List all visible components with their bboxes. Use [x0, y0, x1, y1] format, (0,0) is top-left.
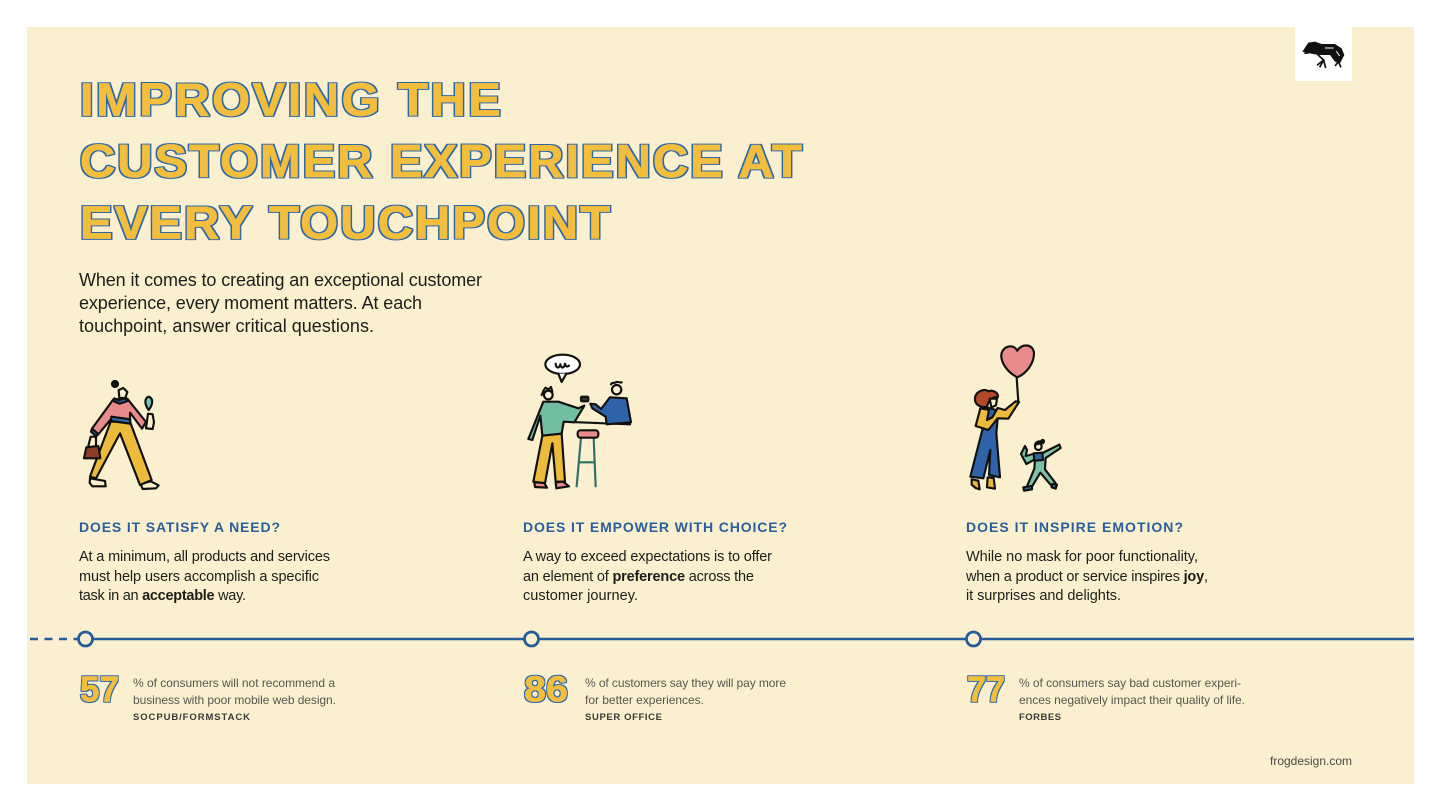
- intro text: When it comes to creating an exceptional customer: [79, 270, 482, 290]
- stat 2: SUPER OFFICE: [585, 712, 662, 723]
- column 3 body: it surprises and delights.: [966, 588, 1121, 604]
- column 2 body: an element of preference across the: [523, 569, 754, 585]
- column 2 heading: DOES IT EMPOWER WITH CHOICE?: [523, 519, 787, 535]
- logo: frog: [1295, 27, 1352, 81]
- column 3 body: While no mask for poor functionality,: [966, 549, 1198, 565]
- column 1 heading: DOES IT SATISFY A NEED?: [79, 519, 280, 535]
- footer url: frogdesign.com: [1270, 754, 1352, 768]
- stat 2: % of customers say they will pay more: [585, 676, 786, 690]
- title: EVERY TOUCHPOINT: [80, 198, 610, 249]
- column 1 body: must help users accomplish a specific: [79, 569, 319, 585]
- stat 3: [967, 668, 1245, 723]
- column 3 heading: DOES IT INSPIRE EMOTION?: [966, 519, 1183, 535]
- stat 1: [80, 668, 336, 723]
- illustration: woman with heart balloon and child: [970, 345, 1061, 491]
- stat 3: ences negatively impact their quality of life.: [1019, 693, 1245, 707]
- column 1 body: At a minimum, all products and services: [79, 549, 330, 565]
- title: [80, 75, 802, 249]
- title: IMPROVING THE: [80, 75, 501, 126]
- intro text: [79, 270, 482, 336]
- column 2 body: customer journey.: [523, 588, 638, 604]
- illustration: customer and bartender: [528, 355, 631, 488]
- title: CUSTOMER EXPERIENCE AT: [80, 136, 802, 188]
- stat 3: FORBES: [1019, 712, 1061, 723]
- stat 2: [524, 668, 786, 723]
- illustration: woman walking with bag and phone: [84, 381, 159, 489]
- stat 2: 86: [524, 668, 568, 710]
- intro text: experience, every moment matters. At each: [79, 293, 422, 313]
- stat 1: business with poor mobile web design.: [133, 693, 336, 707]
- stat 3: % of consumers say bad customer experi-: [1019, 676, 1241, 690]
- column 3 body: [965, 549, 1208, 604]
- timeline: [30, 632, 1414, 646]
- column 3 body: when a product or service inspires joy,: [965, 569, 1208, 585]
- stat 1: % of consumers will not recommend a: [133, 676, 335, 690]
- stat 1: 57: [80, 668, 119, 710]
- column 2 body: A way to exceed expectations is to offer: [523, 549, 772, 565]
- stat 1: SOCPUB/FORMSTACK: [133, 712, 250, 723]
- intro text: touchpoint, answer critical questions.: [79, 316, 374, 336]
- column 1 body: task in an acceptable way.: [79, 588, 246, 604]
- stat 3: 77: [967, 668, 1005, 710]
- stat 2: for better experiences.: [585, 693, 704, 707]
- column 1 body: [79, 549, 330, 604]
- column 2 body: [523, 549, 772, 604]
